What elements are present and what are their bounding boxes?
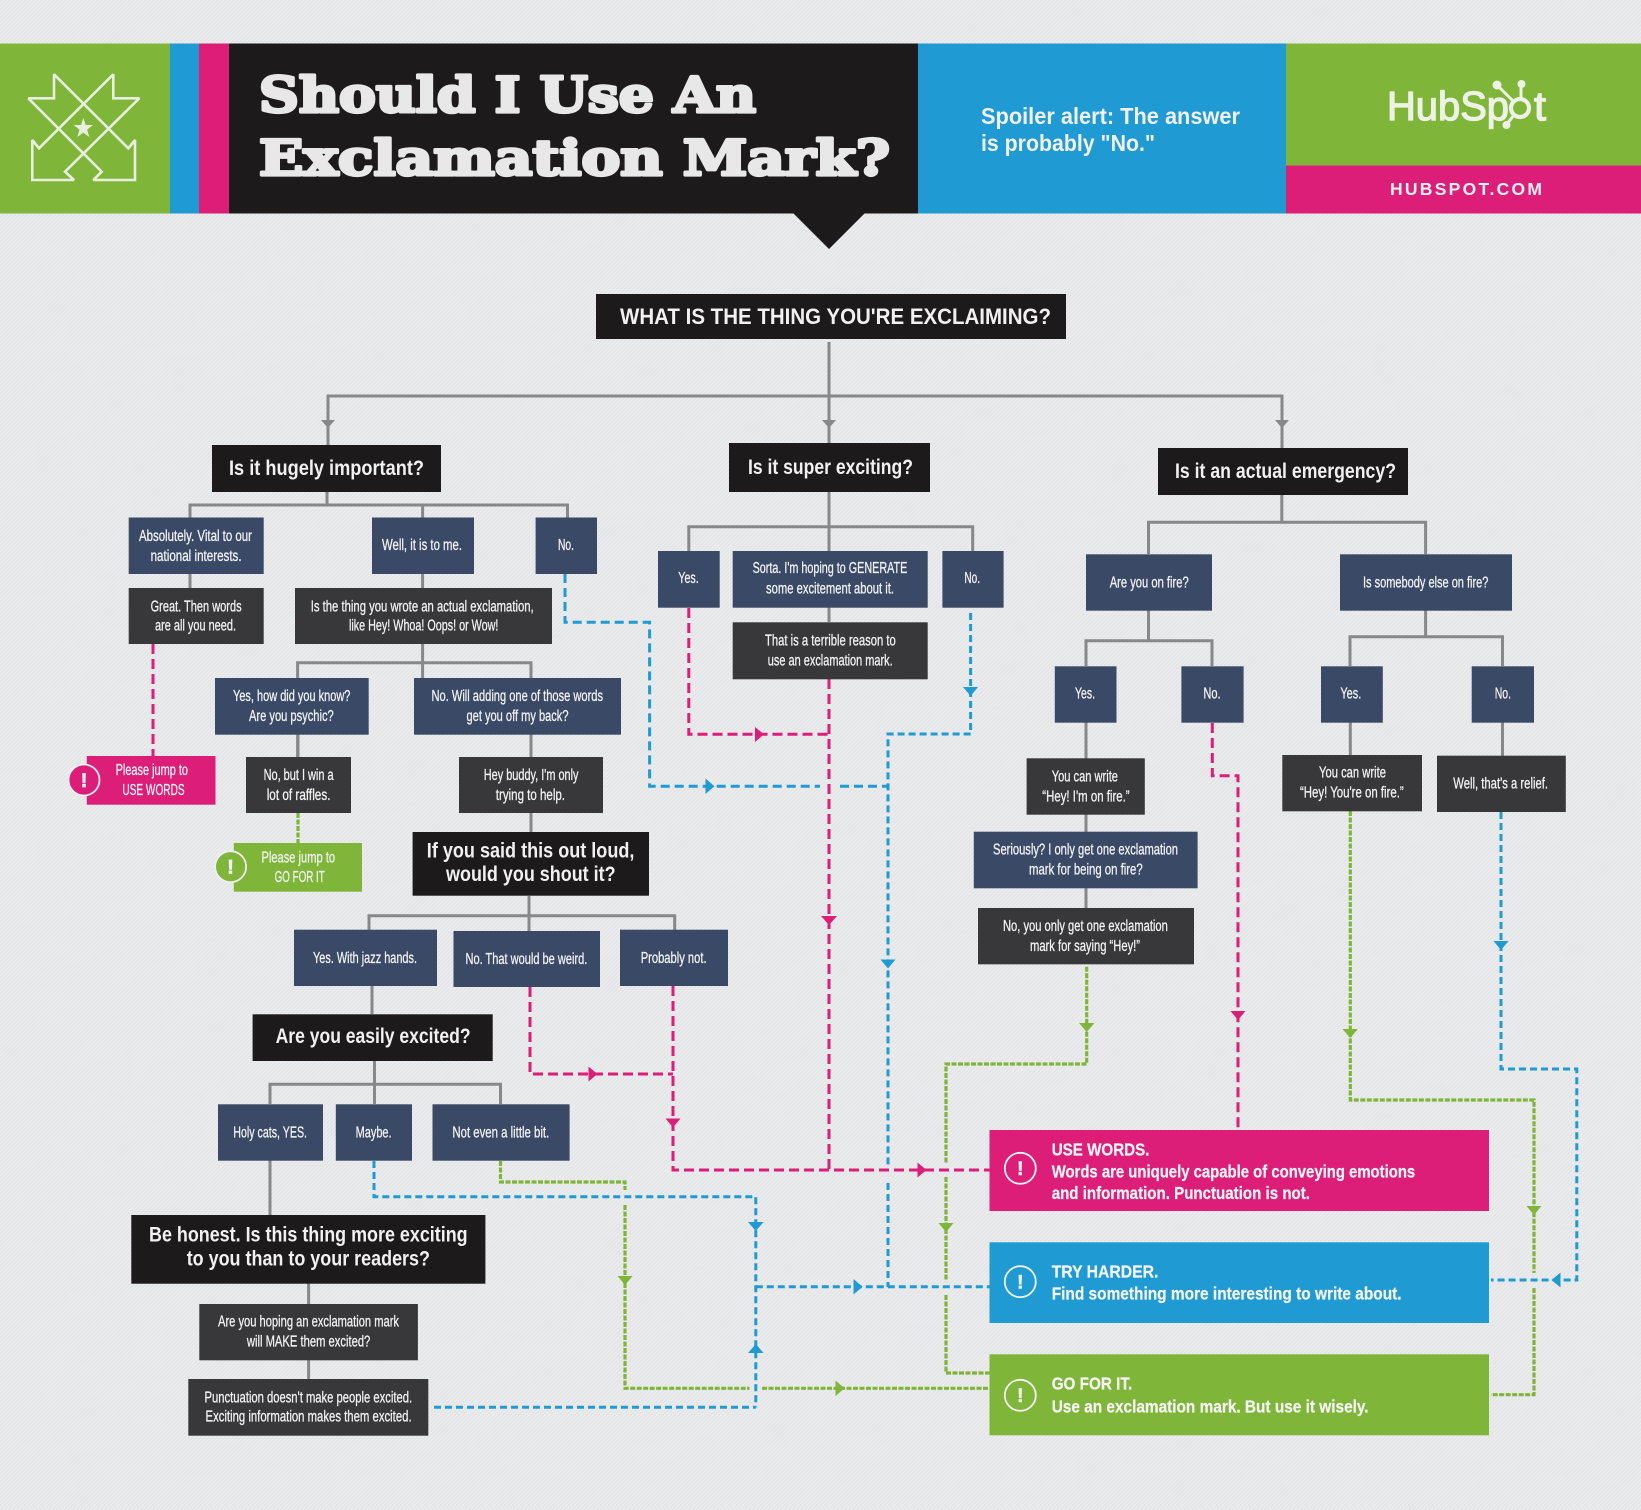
icon: exclamation circle <box>1005 1380 1036 1411</box>
callout: jump to go for it <box>215 843 362 892</box>
answer: jazz hands: Yes. With jazz hands. <box>313 950 417 967</box>
question: shout it <box>413 832 649 896</box>
question: hugely important <box>212 445 441 492</box>
root question: WHAT IS THE THING YOU'RE EXCLAIMING? <box>620 304 1051 329</box>
title <box>259 66 890 187</box>
reply: hoping: Are you hoping an exclamation mark <box>218 1314 399 1331</box>
HubSpot logo: HubSp <box>1387 83 1509 129</box>
reply: great, then words: are all you need. <box>155 618 236 635</box>
reply: terrible reason: That is a terrible reason to <box>765 633 896 650</box>
question: actual emergency: Is it an actual emergency? <box>1175 460 1396 483</box>
icon: exclamation circle <box>1005 1153 1036 1184</box>
reply: terrible reason: use an exclamation mark. <box>768 653 893 670</box>
reply: hey you're on fire: You can write <box>1319 765 1386 782</box>
reply: saying hey: mark for saying “Hey!” <box>1030 938 1140 955</box>
answer: that would be weird <box>454 931 600 987</box>
reply: hey buddy: Hey buddy, I'm only <box>484 767 579 784</box>
question: easily excited <box>253 1014 493 1061</box>
hubspot.com link text: HUBSPOT.COM <box>1390 179 1542 199</box>
question: super exciting <box>729 443 930 492</box>
answer: probably not: Probably not. <box>641 950 707 967</box>
reply: saying hey <box>978 908 1194 964</box>
answer: jazz hands <box>294 930 437 986</box>
question: are you on fire <box>1086 554 1212 611</box>
title: Should I Use An <box>259 66 756 124</box>
reply: saying hey: No, you only get one exclamation <box>1003 918 1168 935</box>
question: somebody else on fire <box>1340 554 1512 611</box>
icon: exclamation badge pink: ! <box>81 771 87 792</box>
answer: yes, psychic: Are you psychic? <box>249 708 334 725</box>
answer: not even a little bit: Not even a little bit. <box>452 1125 549 1142</box>
reply: punctuation <box>188 1379 428 1436</box>
answer: probably not <box>620 930 728 986</box>
question: actual exclamation: like Hey! Whoa! Oops! or Wow! <box>349 618 498 635</box>
spoiler alert text: Spoiler alert: The answer <box>981 103 1240 129</box>
answer: holy cats: Holy cats, YES. <box>233 1125 307 1142</box>
answer: no <box>536 518 597 574</box>
reply: that's a relief <box>1437 756 1566 812</box>
answer: no, nobody on fire <box>1472 666 1534 723</box>
reply: raffles: lot of raffles. <box>267 787 330 804</box>
gray connectors: exciting branch <box>689 527 973 551</box>
pink flow lines and arrows <box>153 608 1246 1178</box>
answer: yes, on fire: Yes. <box>1075 686 1095 703</box>
gray connectors: important branch <box>190 492 675 1379</box>
outcome panel: go for it <box>990 1354 1489 1435</box>
gray connectors: emergency branch <box>1086 495 1502 908</box>
answer: no, exciting: No. <box>964 570 980 587</box>
root question <box>596 294 1066 339</box>
reply: terrible reason <box>733 622 928 679</box>
icon: exclamation badge pink <box>68 764 100 796</box>
reply: punctuation: Exciting information makes them excited. <box>206 1409 412 1426</box>
answer: yes, someone on fire: Yes. <box>1340 686 1361 703</box>
question: only one exclamation mark <box>974 832 1198 888</box>
answer: no, not on fire <box>1181 666 1244 723</box>
outcome panel: use words <box>990 1130 1489 1211</box>
reply: punctuation: Punctuation doesn't make people excited. <box>204 1390 412 1407</box>
reply: hey I'm on fire: You can write <box>1052 769 1118 786</box>
spoiler alert text: is probably "No." <box>981 130 1155 156</box>
reply: hoping <box>199 1304 418 1360</box>
reply: that's a relief: Well, that's a relief. <box>1453 775 1548 792</box>
header banner <box>0 44 1641 249</box>
answer: sorta <box>733 551 928 608</box>
question: hugely important: Is it hugely important? <box>229 457 424 480</box>
answer: that would be weird: No. That would be weird. <box>466 951 587 968</box>
answer: well, it is to me <box>372 518 474 574</box>
reply: hoping: will MAKE them excited? <box>246 1334 370 1351</box>
answer: maybe <box>336 1104 412 1161</box>
answer: yes, psychic: Yes, how did you know? <box>233 688 351 705</box>
outcome panel: try harder: TRY HARDER. <box>1052 1262 1158 1282</box>
question: actual exclamation <box>295 588 552 644</box>
question: shout it: If you said this out loud, <box>427 840 634 863</box>
callout: jump to use words <box>68 756 216 805</box>
outcome panel: try harder <box>990 1242 1489 1323</box>
outcome panel: use words: and information. Punctuation is not. <box>1052 1183 1310 1203</box>
answer: no, not on fire: No. <box>1203 686 1221 703</box>
reply: raffles: No, but I win a <box>264 767 334 784</box>
answer: absolutely: national interests. <box>151 548 242 565</box>
answer: maybe: Maybe. <box>356 1125 392 1142</box>
answer: absolutely <box>129 518 264 574</box>
callout: jump to use words: USE WORDS <box>122 782 185 799</box>
answer: yes, psychic <box>215 678 369 735</box>
answer: no, off my back <box>414 678 621 735</box>
question: actual exclamation: Is the thing you wrote an actual exclamation, <box>311 599 534 616</box>
answer: holy cats <box>218 1104 323 1161</box>
blue flow lines and arrows <box>374 574 1577 1407</box>
reply: hey I'm on fire <box>1027 758 1145 815</box>
question: be honest: Be honest. Is this thing more exciting <box>149 1224 468 1247</box>
question: be honest <box>131 1215 485 1284</box>
reply: raffles <box>246 757 351 813</box>
answer: sorta: some excitement about it. <box>766 581 894 598</box>
question: shout it: would you shout it? <box>445 863 616 886</box>
HubSpot logo: t <box>1534 83 1547 129</box>
question: actual emergency <box>1158 448 1408 495</box>
callout: jump to use words: Please jump to <box>116 762 188 779</box>
question: are you on fire: Are you on fire? <box>1110 575 1189 592</box>
answer: yes, on fire <box>1055 666 1116 723</box>
reply: hey you're on fire: “Hey! You're on fire.” <box>1300 785 1404 802</box>
answer: well, it is to me: Well, it is to me. <box>382 537 462 554</box>
icon: exclamation badge green: ! <box>227 858 234 879</box>
answer: yes, exciting <box>658 551 720 608</box>
reply: hey you're on fire <box>1282 755 1422 811</box>
spoiler alert text <box>981 103 1240 156</box>
answer: yes, exciting: Yes. <box>678 570 699 587</box>
outcome panel: try harder: Find something more interesting to write about. <box>1052 1283 1402 1303</box>
answer: no: No. <box>558 537 574 554</box>
reply: hey buddy <box>459 757 603 813</box>
question: somebody else on fire: Is somebody else on fire? <box>1363 575 1489 592</box>
question: super exciting: Is it super exciting? <box>748 456 913 479</box>
answer: yes, someone on fire <box>1321 666 1383 723</box>
answer: no, off my back: No. Will adding one of those words <box>432 688 603 705</box>
icon: exclamation circle: ! <box>1017 1272 1023 1293</box>
answer: no, off my back: get you off my back? <box>466 708 569 725</box>
reply: great, then words: Great. Then words <box>151 599 242 616</box>
outcome panel: use words: USE WORDS. <box>1052 1140 1150 1160</box>
question: only one exclamation mark: mark for being on fire? <box>1029 861 1143 878</box>
reply: hey buddy: trying to help. <box>496 787 565 804</box>
icon: exclamation badge green <box>215 851 246 882</box>
green flow lines and arrows <box>298 811 1542 1396</box>
question: be honest: to you than to your readers? <box>187 1247 430 1270</box>
callout: jump to go for it: Please jump to <box>262 850 335 867</box>
title: Exclamation Mark? <box>259 129 890 187</box>
outcome panel: go for it: Use an exclamation mark. But use it wisely. <box>1052 1396 1369 1416</box>
answer: no, exciting <box>942 551 1004 608</box>
callout: jump to go for it: GO FOR IT <box>275 869 325 886</box>
outcome panel: go for it: GO FOR IT. <box>1052 1374 1132 1394</box>
gray connectors: top level <box>321 342 1289 622</box>
reply: hey I'm on fire: “Hey! I'm on fire.” <box>1042 789 1130 806</box>
icon: crossed arrows logo with star <box>28 74 139 180</box>
reply: great, then words <box>129 588 264 644</box>
icon: exclamation circle: ! <box>1017 1386 1023 1407</box>
question: only one exclamation mark: Seriously? I only get one exclamation <box>993 841 1178 858</box>
answer: absolutely: Absolutely. Vital to our <box>139 528 252 545</box>
question: easily excited: Are you easily excited? <box>276 1025 471 1048</box>
outcome panel: use words: Words are uniquely capable of conveying emotions <box>1052 1162 1415 1182</box>
icon: exclamation circle: ! <box>1017 1159 1023 1180</box>
answer: not even a little bit <box>432 1104 570 1161</box>
answer: no, nobody on fire: No. <box>1495 686 1511 703</box>
answer: sorta: Sorta. I'm hoping to GENERATE <box>753 560 907 577</box>
icon: exclamation circle <box>1005 1266 1036 1297</box>
